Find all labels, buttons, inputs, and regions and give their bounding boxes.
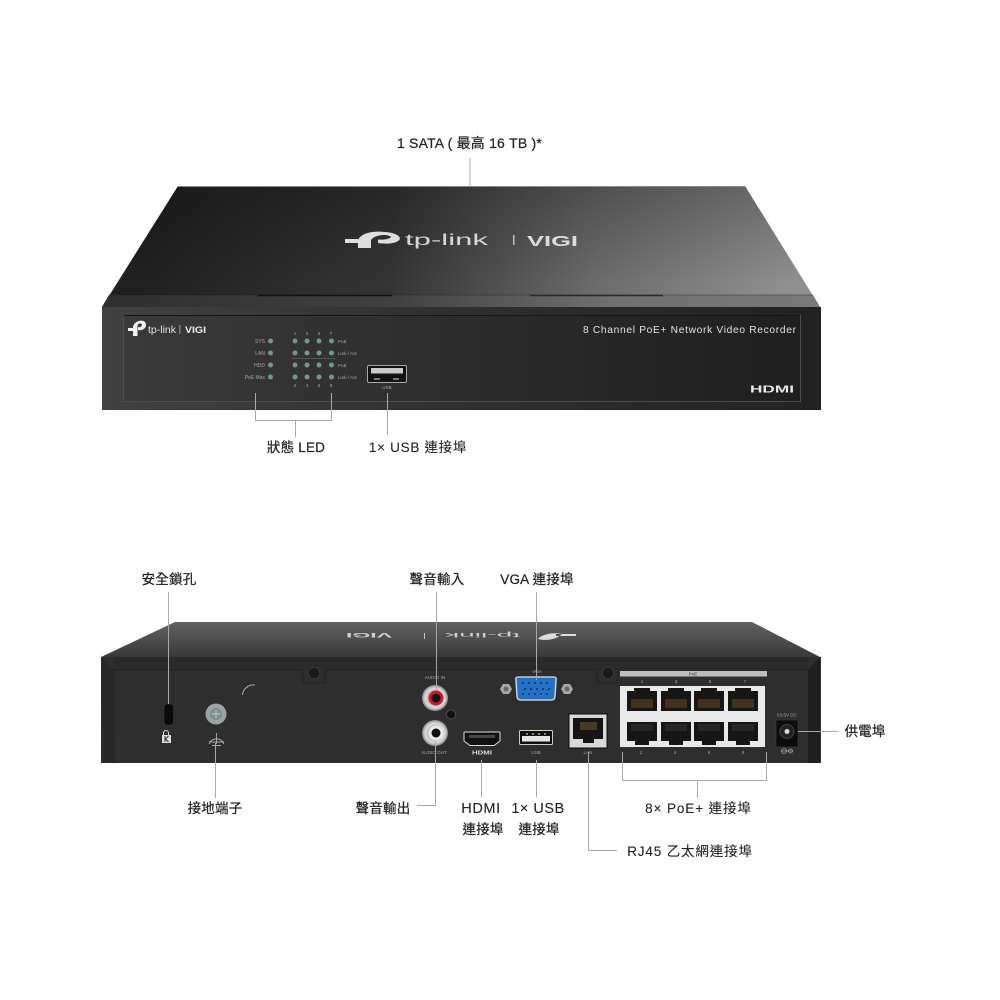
LAN port: LAN — [584, 750, 592, 755]
status LEDs: Link / Act — [338, 375, 357, 380]
logo: top cover — [345, 232, 578, 250]
leader: security lock — [168, 592, 170, 704]
leader: VGA — [536, 592, 538, 680]
PoE label strip: PoE — [689, 672, 697, 677]
HDMI logo: HDMI — [750, 384, 794, 396]
status LEDs: PoE — [338, 363, 347, 368]
PoE ports block — [620, 686, 765, 747]
logo: front panel: tp-link — [148, 324, 177, 336]
leader: audio in — [436, 592, 438, 690]
icon: ground — [209, 733, 224, 746]
label: audio out: 聲音輸出 — [356, 800, 410, 816]
leader: RJ45 — [588, 752, 617, 850]
label: RJ45: RJ45 乙太網連接埠 — [627, 843, 753, 859]
rear logo mirrored: VIGI — [346, 631, 392, 639]
audio out jack — [421, 720, 448, 755]
leader: HDMI — [480, 760, 482, 797]
ground screw — [206, 704, 226, 724]
panel: front view recorder — [102, 186, 821, 410]
label: HDMI: HDMI — [461, 801, 501, 817]
power jack: 53.5V DC — [777, 712, 798, 718]
leader: PoE bracket — [622, 752, 766, 798]
label: audio in: 聲音輸入 — [410, 571, 465, 587]
label: power: 供電埠 — [844, 724, 886, 739]
rear USB port: USB — [531, 750, 541, 755]
PoE label strip: 4 — [674, 750, 677, 755]
logo: top cover: VIGI — [527, 233, 578, 250]
rear USB port — [520, 730, 552, 755]
status LEDs: 4 — [306, 383, 309, 388]
rear top cover — [101, 622, 820, 657]
label: status LED: 狀態 LED — [267, 440, 325, 455]
label: VGA: VGA 連接埠 — [500, 571, 574, 587]
status LEDs — [245, 331, 357, 388]
rear face — [101, 657, 821, 763]
logo: front panel — [128, 321, 206, 336]
status LEDs: 7 — [330, 331, 333, 336]
HDMI port: HDMI — [472, 750, 493, 756]
status LEDs: PoE — [338, 339, 347, 344]
decorative arc — [242, 685, 255, 695]
heading: SATA label: 1 SATA ( 最高 16 TB )* — [397, 135, 542, 151]
status LEDs: 2 — [294, 383, 297, 388]
logo: top cover: tp-link — [405, 232, 490, 249]
VGA port: VGA — [532, 669, 543, 674]
PoE label strip — [620, 671, 767, 755]
HDMI port — [464, 732, 500, 756]
LAN port — [569, 714, 607, 755]
rear screws — [308, 667, 320, 679]
power jack — [776, 712, 798, 754]
leader: front USB — [386, 393, 388, 435]
front face — [102, 307, 821, 410]
label: HDMI — [461, 801, 504, 837]
panel: rear view recorder — [101, 622, 821, 763]
status LEDs: SYS — [255, 339, 266, 345]
status LEDs: 1 — [294, 331, 297, 336]
top cover — [102, 186, 820, 307]
PoE label strip: 5 — [709, 679, 712, 684]
grounding post — [446, 710, 456, 719]
audio in jack — [422, 675, 448, 711]
leader: power — [798, 730, 838, 732]
status LEDs: Link / Act — [338, 351, 357, 356]
status LEDs: LAN — [255, 351, 265, 357]
logo: front panel: VIGI — [185, 325, 206, 336]
label: rear USB — [511, 801, 565, 837]
front USB port: USB — [382, 385, 392, 390]
label: rear USB: 1× USB — [511, 801, 565, 817]
label: rear USB: 連接埠 — [518, 821, 560, 837]
status LEDs: 5 — [318, 331, 321, 336]
status LEDs: 3 — [306, 331, 309, 336]
audio out jack: AUDIO OUT — [421, 750, 447, 755]
leader: SATA — [469, 158, 471, 203]
leader: rear USB — [536, 760, 538, 797]
security slot — [164, 704, 174, 725]
status LEDs: HDD — [254, 363, 265, 369]
front model text: 8 Channel PoE+ Network Video Recorder — [583, 325, 797, 336]
PoE label strip: 2 — [640, 750, 643, 755]
label: security lock: 安全鎖孔 — [142, 572, 197, 587]
leader: audio out — [417, 741, 436, 806]
PoE label strip: 7 — [744, 679, 747, 684]
VGA port — [500, 669, 573, 700]
front USB port — [368, 366, 406, 390]
PoE label strip: 3 — [675, 679, 678, 684]
icon: Kensington lock — [162, 730, 171, 743]
PoE label strip: 6 — [708, 750, 711, 755]
rear logo mirrored — [346, 631, 576, 640]
leader: ground — [214, 743, 216, 798]
PoE label strip: 8 — [742, 750, 745, 755]
label: front USB: 1× USB 連接埠 — [369, 439, 467, 455]
status LEDs: 8 — [330, 383, 333, 388]
status LEDs: PoE Max — [245, 375, 265, 381]
label: ground: 接地端子 — [188, 800, 242, 816]
status LEDs: 6 — [318, 383, 321, 388]
cover front lip — [102, 295, 820, 307]
PoE label strip: 1 — [641, 679, 644, 684]
audio in jack: AUDIO IN — [425, 675, 445, 680]
label: HDMI: 連接埠 — [462, 821, 504, 837]
rear logo mirrored: tp-link — [445, 631, 520, 639]
front inner panel — [124, 316, 800, 402]
label: PoE ports: 8× PoE+ 連接埠 — [645, 800, 752, 816]
leader: status LED bracket — [256, 393, 332, 437]
